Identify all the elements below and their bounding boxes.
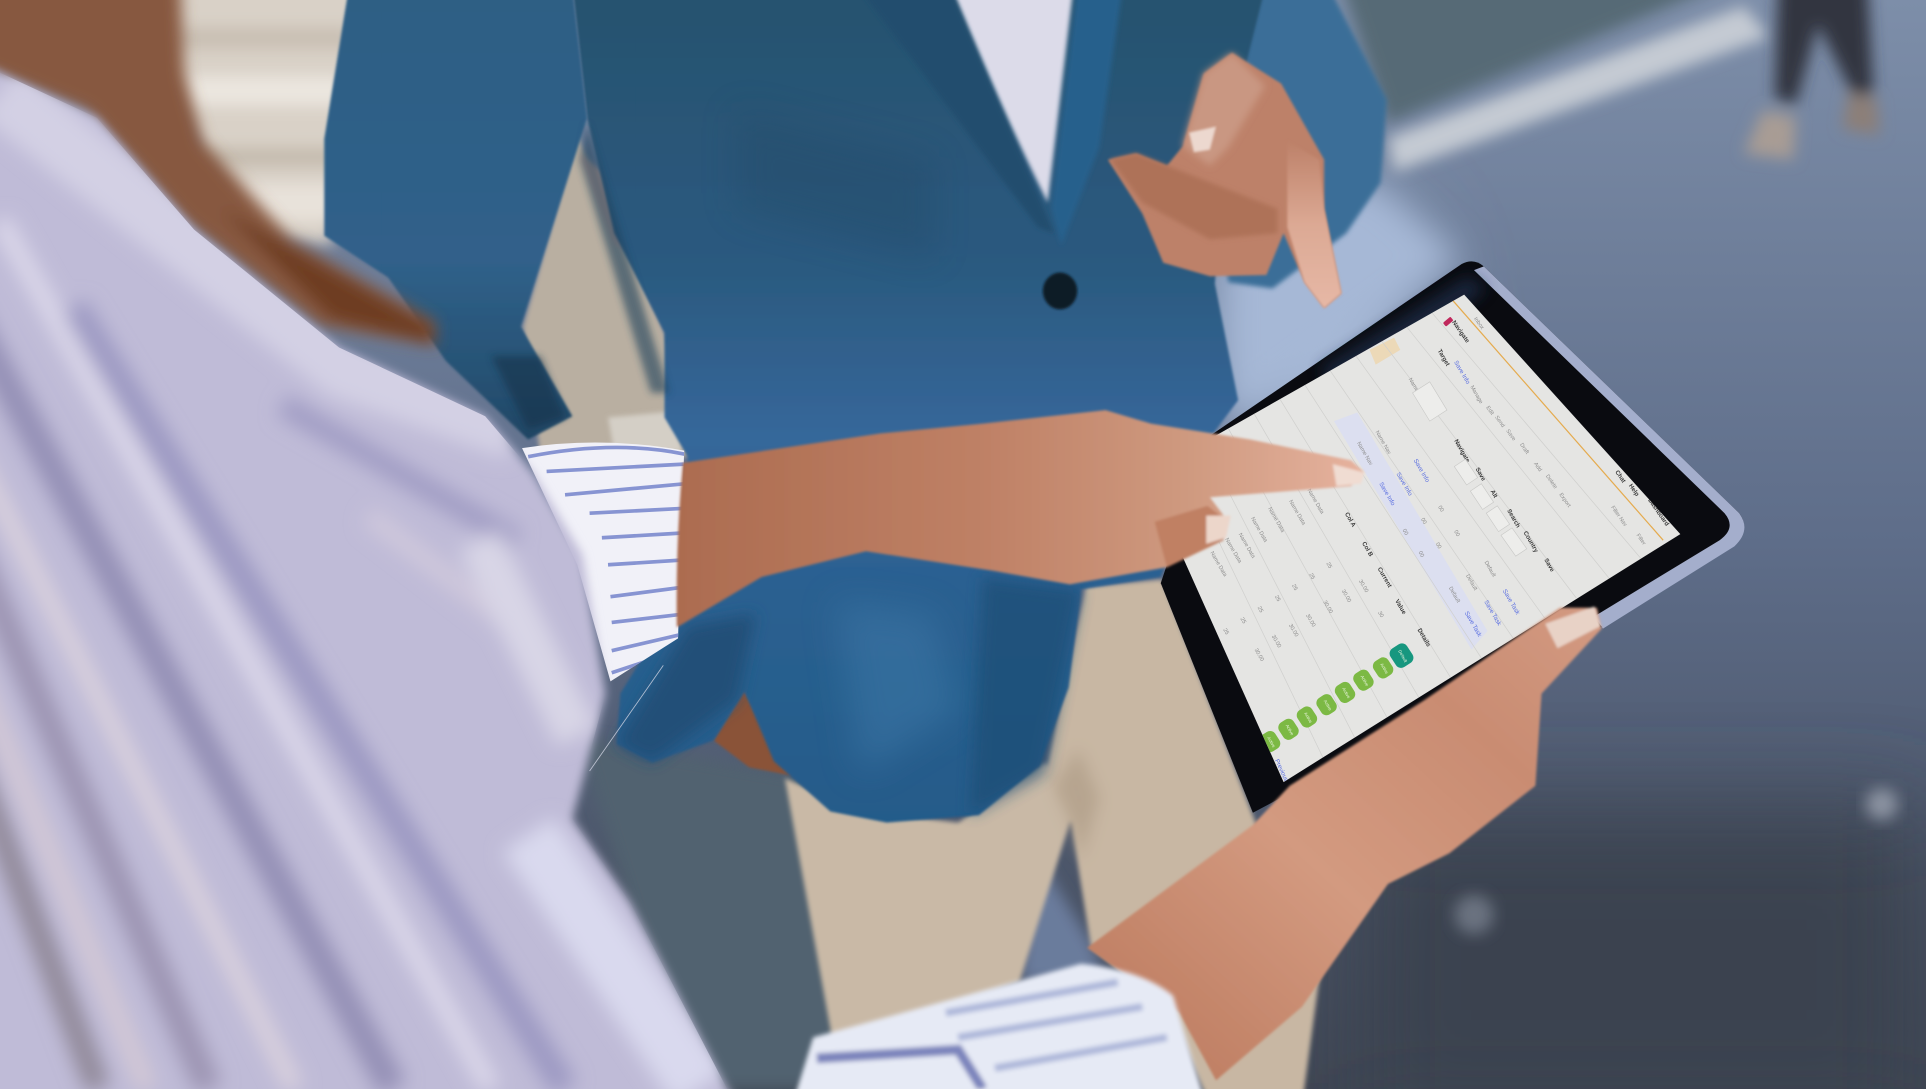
tablet screen: Inbox	[1472, 316, 1485, 331]
tablet screen: Name Data	[1209, 551, 1228, 579]
tablet screen: Save Task	[1463, 610, 1483, 639]
tablet screen: Edit	[1484, 405, 1495, 417]
tablet screen: Send	[1493, 415, 1506, 429]
tablet screen: Name Data	[1237, 532, 1256, 560]
tablet screen: 25	[1325, 561, 1333, 570]
tablet screen: Details	[1416, 627, 1432, 649]
white shirt	[951, 0, 1074, 203]
tablet screen: Target	[1436, 348, 1451, 367]
tablet screen: 25	[1290, 583, 1298, 592]
man's blazer	[324, 0, 1387, 823]
tablet screen: Name Data	[1249, 516, 1269, 544]
blazer left sleeve	[324, 0, 587, 440]
tablet screen: 30.00	[1357, 579, 1369, 594]
tablet screen: Name Data	[1266, 506, 1286, 534]
tablet screen: 25	[1273, 594, 1281, 603]
tablet screen: Save	[1474, 466, 1487, 483]
tablet screen: Filter Nav	[1609, 505, 1628, 528]
tablet screen: Country	[1522, 530, 1540, 554]
woman's hair	[0, 0, 436, 346]
footer link: Previous	[1273, 758, 1289, 783]
app header text: Navigate	[1450, 319, 1471, 345]
tablet screen: Save Info	[1395, 471, 1414, 498]
tablet screen: 00	[1436, 505, 1445, 513]
status pills: Active	[1266, 736, 1277, 749]
tablet screen: Value	[1393, 598, 1408, 616]
tablet screen: Save Task	[1501, 588, 1521, 617]
blazer button	[1043, 273, 1077, 309]
tablet screen: Save Info	[1377, 481, 1397, 507]
woman's holding hand	[1087, 607, 1602, 1080]
blazer torso	[572, 0, 1265, 823]
tablet screen: Current	[1376, 566, 1393, 589]
lower table headers: Col A	[1343, 511, 1357, 529]
tablet screen: 00	[1434, 542, 1442, 550]
tablet screen	[1146, 295, 1680, 783]
tablet screen: Alt	[1489, 489, 1499, 499]
tablet screen: 30.00	[1287, 623, 1299, 638]
tablet screen: Name Nav	[1355, 441, 1374, 467]
tablet screen: 25	[1221, 628, 1230, 636]
status pills: Active	[1303, 711, 1314, 724]
tablet screen: 30	[1376, 610, 1384, 619]
status pills	[1258, 641, 1416, 754]
selected row	[1334, 413, 1487, 649]
tablet screen: Name Data	[1287, 499, 1307, 527]
tablet screen: Default	[1483, 560, 1497, 579]
woman's striped sleeve cuff near elbow	[522, 443, 685, 681]
tablet screen: Save	[1542, 557, 1556, 574]
tablet screen: Delete	[1544, 474, 1558, 490]
tablet glare	[1320, 276, 1486, 405]
tablet screen: 00	[1419, 517, 1427, 525]
orange header line	[1453, 301, 1663, 540]
blazer lapels	[859, 0, 1054, 233]
logo tag	[1443, 317, 1454, 327]
tablet screen: 25	[1307, 572, 1316, 581]
man's trousers	[785, 579, 1320, 1089]
tablet screen: Add	[1532, 461, 1543, 473]
tablet screen: Save Info	[1452, 360, 1472, 386]
status pills: Active	[1379, 662, 1390, 675]
background: beige wall behind the man	[123, 0, 688, 457]
tablet screen: Name Data	[1223, 537, 1243, 565]
lower table names: Name Data	[1306, 488, 1325, 516]
woman's forearm and pointing hand	[677, 410, 1365, 627]
tablet silver edge	[1474, 266, 1744, 629]
upper table headers: Navigate	[1452, 438, 1471, 464]
tablet screen: 00	[1452, 529, 1461, 538]
blazer shading	[491, 110, 1081, 815]
header tint	[1370, 338, 1400, 365]
woman's lower sleeve cuff	[792, 964, 1206, 1089]
tablet screen: Chat	[1613, 469, 1627, 484]
tablet screen: Default	[1447, 586, 1461, 604]
tablet screen: 30.00	[1321, 600, 1334, 615]
man's hand in pocket	[714, 691, 793, 776]
tablet screen: Filter	[1635, 533, 1647, 546]
status pills: Active	[1341, 687, 1352, 700]
tablet screen: 30.00	[1340, 589, 1352, 604]
tablet screen: 30.00	[1253, 648, 1265, 663]
tablet	[1146, 261, 1744, 813]
upper table cells: Name Nav	[1407, 377, 1425, 403]
tablet screen: Search	[1505, 508, 1522, 529]
tablet screen: 25	[1239, 617, 1247, 625]
blazer right sleeve	[1204, 0, 1387, 289]
tablet screen: Name Nav	[1374, 430, 1392, 456]
background: distant person's legs	[1744, 0, 1879, 160]
status pills: Default	[1397, 649, 1409, 664]
tablet screen: 00	[1417, 550, 1425, 559]
tablet body	[1161, 261, 1744, 813]
tablet screen: Save Info	[1412, 458, 1431, 484]
blouse thread	[590, 665, 663, 771]
tablet screen: Manage	[1468, 385, 1484, 405]
tablet screen: Col B	[1360, 541, 1375, 558]
tablet screen: 30.00	[1270, 634, 1282, 649]
status pills: Active	[1323, 699, 1333, 712]
tablet screen: Help	[1627, 483, 1640, 498]
tablet screen: 25	[1256, 606, 1264, 614]
tablet screen: Export	[1557, 492, 1572, 509]
tablet screen: Save Task	[1482, 599, 1503, 628]
status pills: Active	[1285, 723, 1295, 737]
input boxes	[1413, 382, 1527, 556]
man's pointing hand	[1108, 53, 1341, 308]
tablet screen: Default	[1464, 574, 1478, 592]
tablet screen: 30.00	[1304, 613, 1316, 628]
tablet screen: Draft	[1518, 442, 1530, 456]
woman's striped blouse	[0, 61, 749, 1089]
tablet screen: Dashboard	[1646, 497, 1670, 528]
status pills: Active	[1360, 674, 1370, 687]
tablet screen: 00	[1401, 528, 1409, 536]
tablet screen: Save	[1504, 428, 1516, 442]
